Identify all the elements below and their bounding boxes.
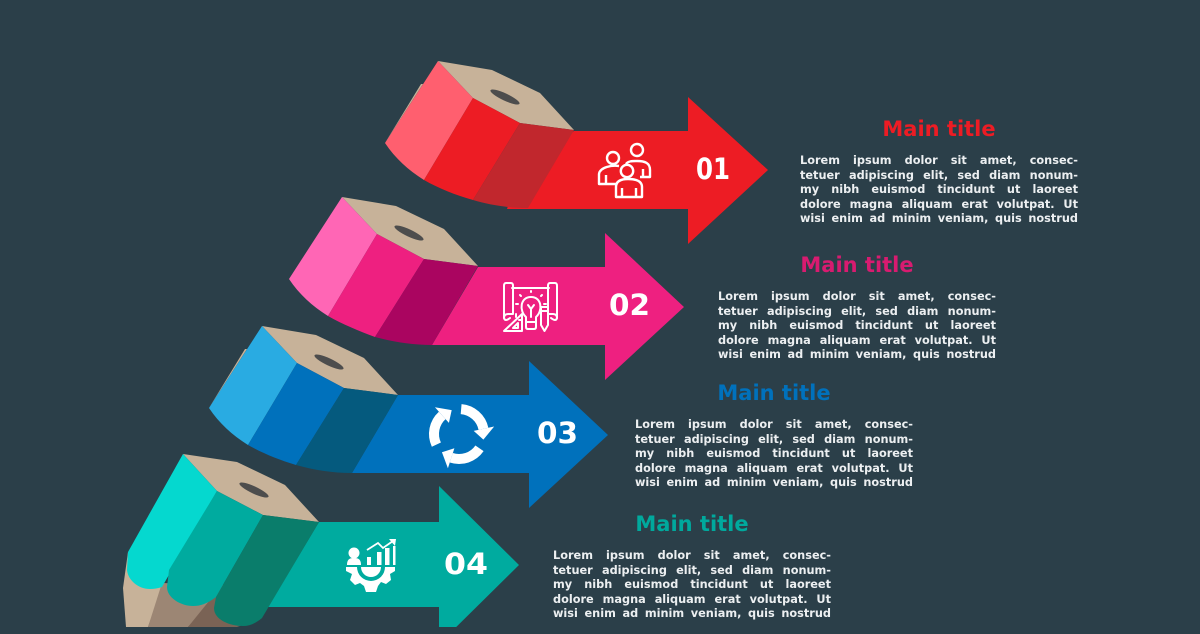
arrow 04 with pencil <box>123 454 519 634</box>
arrow 03 with pencil <box>209 326 608 508</box>
body text 02: Lorem ipsum dolor sit amet, consec- <box>718 290 996 303</box>
body text 03 <box>635 418 913 489</box>
body text 04 <box>553 549 831 620</box>
icon: cycle arrows <box>419 399 497 468</box>
number 02: 02 <box>609 288 650 322</box>
body text 02 <box>718 290 996 361</box>
text block 02 <box>718 253 996 361</box>
text block 04 <box>553 512 831 620</box>
body text 01 <box>800 154 1078 225</box>
heading 02: Main title <box>800 253 914 277</box>
number 03: 03 <box>537 416 578 450</box>
text block 03 <box>635 381 913 489</box>
heading 03: Main title <box>717 381 831 405</box>
text block 01 <box>800 117 1078 225</box>
arrow 03 <box>352 361 608 508</box>
body text 03: tetuer adipiscing elit, sed diam nonum- <box>635 432 913 446</box>
heading 01: Main title <box>882 117 996 141</box>
arrow 02 <box>432 233 684 380</box>
icon: gear with chart and person <box>346 539 396 592</box>
pencil 02 <box>289 197 478 345</box>
body text 03: my nibh euismod tincidunt ut laoreet <box>635 447 913 460</box>
body text 04: tetuer adipiscing elit, sed diam nonum- <box>553 564 831 576</box>
body text 03: Lorem ipsum dolor sit amet, consec- <box>635 418 913 431</box>
body text 02: my nibh euismod tincidunt ut laoreet <box>718 319 996 332</box>
body text 01: wisi enim ad minim veniam, quis nostrud <box>800 212 1078 225</box>
number 04: 04 <box>444 547 488 581</box>
pencil 01 <box>385 61 574 208</box>
arrow 01 with pencil <box>385 61 768 244</box>
icon: people <box>599 144 650 197</box>
body text 03: wisi enim ad minim veniam, quis nostrud <box>635 476 913 489</box>
arrow 04 <box>268 486 519 634</box>
body text 01: dolore magna aliquam erat volutpat. Ut <box>800 198 1078 210</box>
arrow 02 with pencil <box>289 197 684 380</box>
body text 01: tetuer adipiscing elit, sed diam nonum- <box>800 168 1078 182</box>
body text 04: dolore magna aliquam erat volutpat. Ut <box>553 592 831 606</box>
body text 03: dolore magna aliquam erat volutpat. Ut <box>635 462 913 474</box>
body text 04: my nibh euismod tincidunt ut laoreet <box>553 578 831 591</box>
body text 02: wisi enim ad minim veniam, quis nostrud <box>718 348 996 361</box>
body text 01: Lorem ipsum dolor sit amet, consec- <box>800 154 1078 167</box>
body text 01: my nibh euismod tincidunt ut laoreet <box>800 183 1078 196</box>
body text 02: dolore magna aliquam erat volutpat. Ut <box>718 334 996 346</box>
number 01: 01 <box>696 152 730 186</box>
heading 04: Main title <box>635 512 749 536</box>
pencil 04 <box>123 454 319 627</box>
body text 04: wisi enim ad minim veniam, quis nostrud <box>553 607 831 620</box>
body text 02: tetuer adipiscing elit, sed diam nonum- <box>718 304 996 318</box>
icon: blueprint with bulb <box>504 283 557 331</box>
pencil 03 <box>209 326 398 473</box>
arrow 01 <box>507 97 768 244</box>
body text 04: Lorem ipsum dolor sit amet, consec- <box>553 549 831 562</box>
